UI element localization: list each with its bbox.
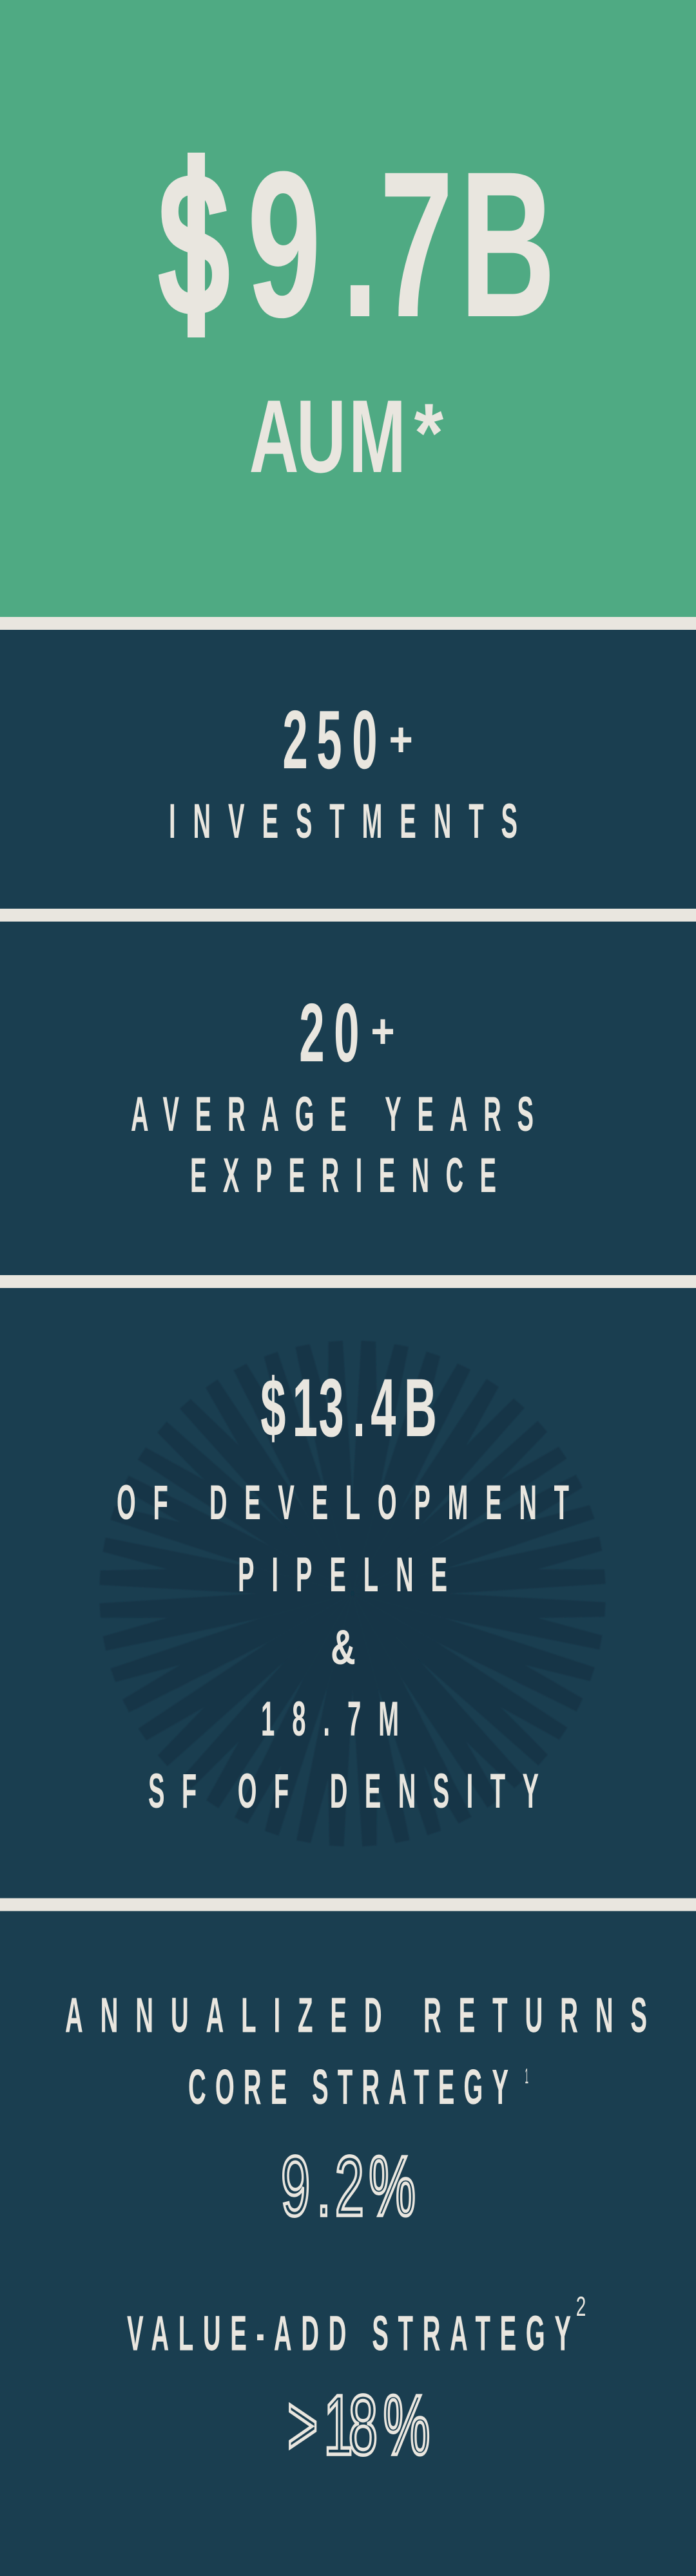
- panel: AUM: [0, 0, 696, 617]
- experience value: [299, 987, 395, 1080]
- panel: experience: [0, 922, 696, 1275]
- core strategy label: CORE STRATEGY: [188, 2059, 508, 2114]
- experience value: 20: [299, 987, 360, 1080]
- investments label: INVESTMENTS: [169, 793, 517, 848]
- development label line 1: OF DEVELOPMENT: [117, 1474, 569, 1530]
- AUM value: $9.7B: [157, 129, 556, 361]
- footnote marker 1: 1: [525, 2065, 528, 2088]
- experience label line 1: AVERAGE YEARS: [131, 1086, 534, 1141]
- value-add strategy value: >18%: [287, 2378, 430, 2473]
- density label: SF OF DENSITY: [148, 1763, 539, 1818]
- investments value: 250: [282, 694, 378, 787]
- density value: 18.7M: [261, 1690, 399, 1746]
- value-add strategy label: VALUE-ADD STRATEGY: [127, 2306, 571, 2361]
- AUM label: AUM: [249, 379, 406, 494]
- development value: $13.4B: [260, 1361, 437, 1454]
- panel: development pipeline: [0, 1288, 696, 1899]
- experience label line 2: EXPERIENCE: [190, 1147, 496, 1202]
- returns heading: ANNUALIZED RETURNS: [65, 1987, 647, 2043]
- investments value: +: [389, 712, 413, 766]
- development label line 2: PIPELNE: [238, 1546, 447, 1602]
- panel: annualized returns: [0, 1911, 696, 2576]
- sunburst graphic: [93, 1335, 612, 1852]
- core strategy value: 9.2%: [281, 2139, 416, 2234]
- panel: investments: [0, 630, 696, 909]
- AUM label: *: [414, 386, 443, 480]
- experience value: +: [371, 1004, 395, 1058]
- footnote marker 2: 2: [576, 2291, 586, 2322]
- ampersand: &: [331, 1619, 356, 1674]
